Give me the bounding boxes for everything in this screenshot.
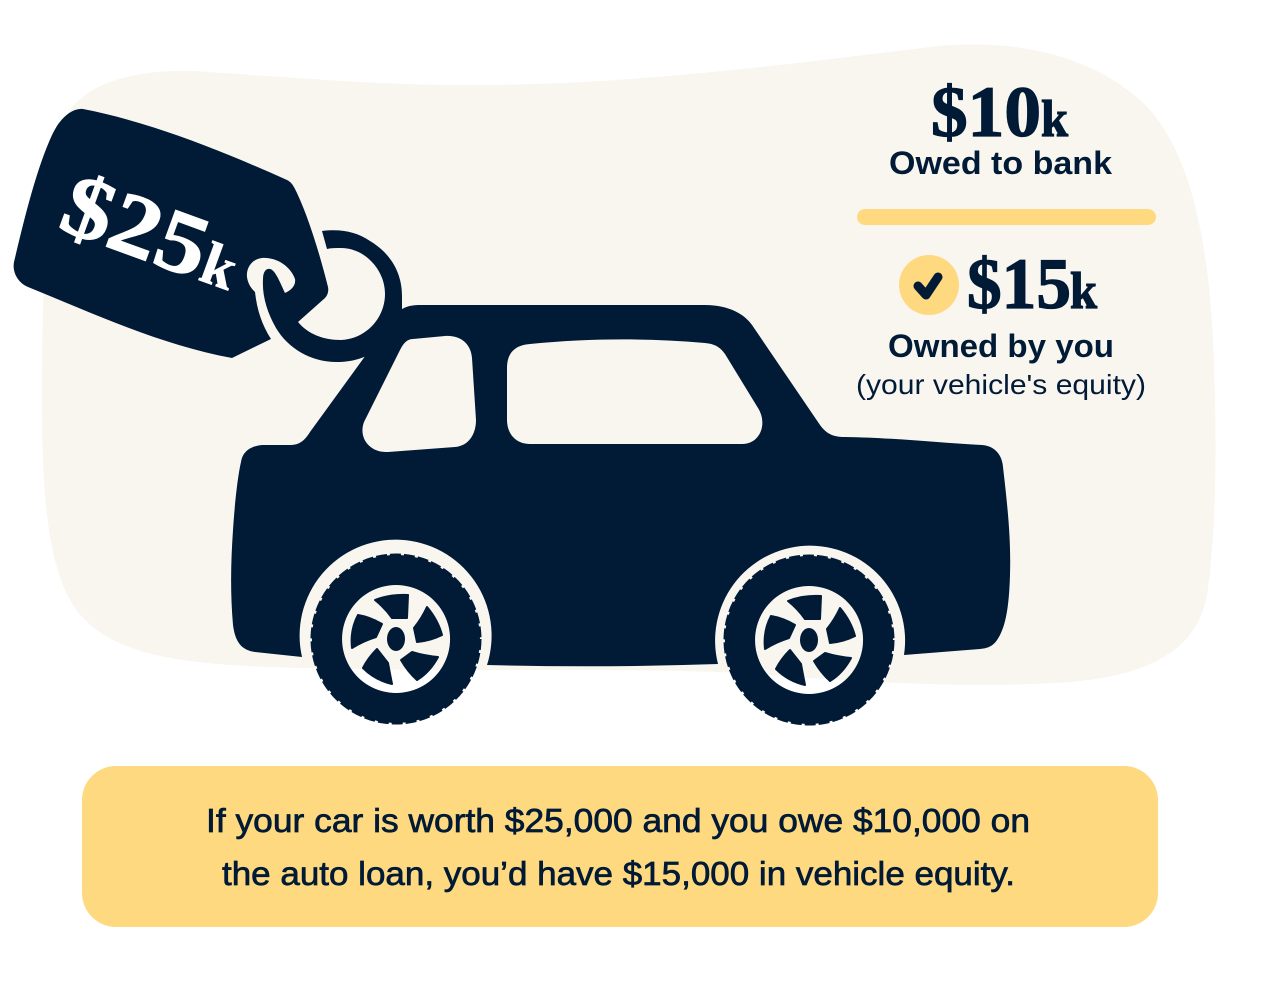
label: owed to bank: Owed to bank <box>889 145 1112 181</box>
label: owned by you: Owned by you <box>888 328 1114 364</box>
price tag <box>14 109 402 362</box>
tag price <box>49 156 255 310</box>
tag price: k <box>193 229 247 303</box>
car front window <box>362 336 476 452</box>
callout text: If your car is worth $25,000 and you owe $10,000 on <box>206 802 1030 839</box>
divider <box>857 209 1156 225</box>
car rear window <box>507 339 762 444</box>
car body <box>231 305 1010 666</box>
tag ring <box>263 230 402 362</box>
amount owned: $15k: $15 <box>967 244 1071 324</box>
callout text: the auto loan, you’d have $15,000 in vehicle equity. <box>222 855 1015 892</box>
background blob <box>42 44 1215 685</box>
amount owed: $10k: $10 <box>931 72 1041 152</box>
icon: check badge <box>899 255 959 315</box>
tag shape <box>14 109 328 358</box>
amount owed: $10k: k <box>1041 91 1068 148</box>
label: your vehicle's equity: (your vehicle's equity) <box>856 369 1146 400</box>
callout text <box>206 802 1030 892</box>
tag price: $25 <box>49 156 222 298</box>
callout <box>82 766 1158 927</box>
amount owned: $15k: k <box>1070 263 1097 320</box>
wheel: left <box>312 554 480 724</box>
wheel: right <box>724 556 894 724</box>
